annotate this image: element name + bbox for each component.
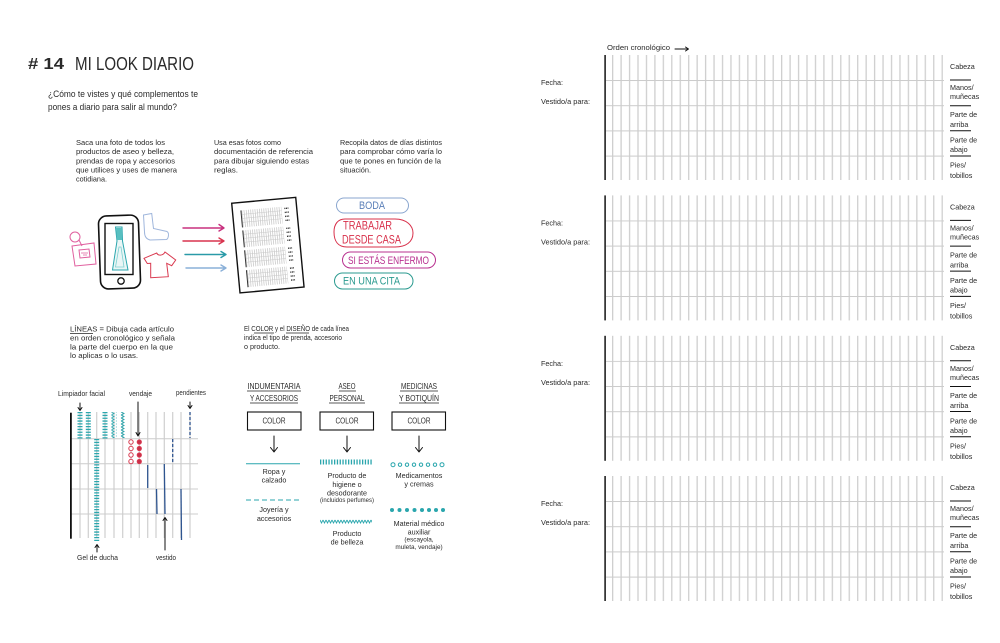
chart block 1: muñecas: [950, 92, 980, 101]
legend column: indumentaria: Joyería y: [259, 505, 289, 514]
subtitle question: pones a diario para salir al mundo?: [48, 102, 177, 112]
legend column: indumentaria: Ropa y: [263, 467, 286, 476]
legend column: indumentaria: accesorios: [257, 514, 292, 523]
blue clothing lines: [148, 412, 190, 540]
text block: step 3: para comprobar cómo varía lo: [340, 147, 442, 156]
text block: líneas: LÍNEAS = Dibuja cada artículo: [70, 324, 174, 334]
legend column: aseo personal: [320, 382, 374, 546]
chart block 3: tobillos: [950, 452, 973, 461]
text block: step 3: [340, 138, 442, 174]
text block: líneas: [70, 324, 176, 360]
text block: step 2: [214, 138, 314, 174]
chart block 4: Parte de: [950, 531, 977, 540]
chart block 1: abajo: [950, 145, 968, 154]
pill: si estás enfermo: [342, 252, 436, 268]
chart block 2: tobillos: [950, 311, 973, 320]
text block: líneas: la parte del cuerpo en la que: [70, 342, 173, 352]
chart block 2: arriba: [950, 260, 968, 269]
icon: phone with bottle: [98, 215, 141, 289]
pill: boda: [336, 198, 408, 213]
chart block 1: arriba: [950, 120, 968, 129]
legend column: medicinas: Y BOTIQUÍN: [399, 393, 439, 403]
chart block 4: abajo: [950, 566, 968, 575]
chart block 3: Manos/: [950, 364, 974, 373]
legend column: indumentaria: COLOR: [262, 416, 286, 426]
grid of example chart: [70, 412, 198, 539]
chart block 4: muñecas: [950, 513, 980, 522]
text block: step 3: que te pones en función de la: [340, 156, 442, 166]
chart block 4: Vestido/a para:: [541, 518, 590, 527]
text block: step 2: documentación de referencia: [214, 147, 314, 156]
legend column: medicinas: Material médico: [394, 519, 444, 528]
legend column: aseo personal: higiene o: [332, 480, 362, 489]
pill: en una cita: [334, 273, 413, 289]
icon: t-shirt: [144, 252, 176, 278]
pill: si estás enfermo: SI ESTÁS ENFERMO: [348, 254, 429, 267]
legend column: medicinas: Medicamentos: [396, 471, 443, 480]
teal hygiene marks: [80, 412, 105, 541]
arrows: photos to sheet: [183, 224, 226, 271]
text block: step 2: reglas.: [214, 166, 238, 174]
chart block 3: Parte de: [950, 391, 977, 400]
annotation labels: Limpiador facial: [58, 389, 105, 398]
chart block 1: Vestido/a para:: [541, 97, 590, 106]
chart block 1: Cabeza: [950, 62, 975, 71]
chart block 3: Cabeza: [950, 343, 975, 352]
chart block 4: tobillos: [950, 592, 973, 601]
chart block 1: Parte de: [950, 110, 977, 119]
text block: color y diseño: indica el tipo de prenda, accesorio: [244, 333, 342, 342]
annotation labels: [58, 388, 206, 562]
chart block 2: Vestido/a para:: [541, 237, 590, 246]
chart block 1: Fecha:: [541, 78, 563, 87]
chart block 4: Cabeza: [950, 483, 975, 492]
legend column: indumentaria: INDUMENTARIA: [248, 382, 301, 391]
text block: step 2: para dibujar siguiendo estas: [214, 156, 309, 166]
chart block 2: Pies/: [950, 301, 966, 310]
chart block 4: Parte de: [950, 556, 977, 566]
chart block 4: Manos/: [950, 504, 974, 513]
chart block 1: tobillos: [950, 171, 973, 180]
text block: step 1: que utilices y uses de manera: [76, 166, 178, 174]
chart block 1: [541, 55, 980, 180]
chart block 3: Parte de: [950, 416, 977, 425]
text block: step 1: [76, 138, 178, 184]
chart block 3: muñecas: [950, 373, 980, 382]
text block: color y diseño: [244, 324, 350, 351]
legend column: medicinas: (escayola,: [404, 536, 434, 544]
icon: sock: [144, 214, 168, 240]
chart block 2: Fecha:: [541, 218, 563, 227]
chart block 4: Fecha:: [541, 499, 563, 508]
legend column: medicinas: [390, 382, 446, 551]
legend column: medicinas: COLOR: [408, 416, 431, 426]
chart block 1: Parte de: [950, 136, 977, 144]
text block: líneas: lo aplicas o lo usas.: [70, 351, 138, 360]
legend column: aseo personal: COLOR: [336, 416, 359, 426]
legend column: medicinas: muleta, vendaje): [395, 544, 443, 551]
chart block 4: Pies/: [950, 582, 966, 590]
annotation labels: vendaje: [129, 389, 152, 398]
chart block 3: abajo: [950, 426, 968, 435]
chart block 2: abajo: [950, 285, 968, 294]
text block: color y diseño: El COLOR y el DISEÑO de cada línea: [244, 324, 350, 333]
annotation labels: pendientes: [176, 388, 206, 397]
legend column: aseo personal: Producto de: [328, 471, 366, 480]
annotation arrows: [78, 402, 192, 552]
legend column: medicinas: auxiliar: [408, 528, 431, 536]
chart block 2: Parte de: [950, 250, 977, 259]
legend column: aseo personal: Producto: [333, 529, 361, 538]
text block: step 1: prendas de ropa y accesorios: [76, 156, 175, 166]
pill: boda: BODA: [359, 200, 386, 212]
text block: step 3: situación.: [340, 166, 371, 174]
heading: number: # 14: [28, 56, 64, 73]
legend column: indumentaria: calzado: [262, 476, 286, 484]
pill: en una cita: EN UNA CITA: [343, 276, 401, 288]
legend column: indumentaria: Y ACCESORIOS: [250, 394, 298, 403]
annotation labels: Gel de ducha: [77, 553, 118, 562]
text block: step 1: Saca una foto de todos los: [76, 138, 165, 147]
chart block 3: Fecha:: [541, 359, 563, 368]
chart block 4: [541, 476, 980, 601]
chart block 1: Manos/: [950, 83, 974, 92]
pill: trabajar desde casa: TRABAJAR: [343, 218, 392, 232]
text block: step 2: Usa esas fotos como: [214, 138, 281, 147]
legend column: aseo personal: PERSONAL: [330, 394, 365, 403]
chart block 2: [541, 195, 980, 320]
annotation labels: vestido: [156, 553, 176, 562]
legend column: aseo personal: ASEO: [338, 382, 356, 391]
legend column: indumentaria: [246, 382, 301, 523]
text block: color y diseño: o producto.: [244, 342, 280, 351]
chart block 2: Cabeza: [950, 202, 975, 211]
legend column: aseo personal: desodorante: [327, 488, 367, 498]
chart block 2: muñecas: [950, 232, 980, 241]
pill: trabajar desde casa: DESDE CASA: [342, 232, 401, 246]
teal beauty zigzags: [112, 412, 125, 438]
text block: líneas: en orden cronológico y señala: [70, 334, 176, 342]
chart block 3: Pies/: [950, 441, 966, 450]
axis label: orden cronológico: Orden cronológico: [607, 43, 670, 52]
chart block 3: arriba: [950, 401, 968, 410]
chart: example line chart: [58, 388, 206, 562]
sheet: miniature of the chart page: [232, 197, 304, 293]
subtitle question: ¿Cómo te vistes y qué complementos te: [48, 89, 198, 99]
icon: perfume bottle: [70, 232, 96, 266]
chart block 2: Manos/: [950, 223, 974, 232]
legend column: aseo personal: (incluidos perfumes): [320, 498, 374, 504]
chart block 4: arriba: [950, 541, 968, 550]
legend column: medicinas: y cremas: [404, 480, 434, 489]
text block: step 1: cotidiana.: [76, 174, 107, 184]
red medicine dots: [129, 440, 141, 464]
chart block 3: Vestido/a para:: [541, 378, 590, 387]
chart block 1: Pies/: [950, 160, 966, 170]
legend column: medicinas: MEDICINAS: [401, 382, 437, 391]
subtitle question: [48, 89, 198, 112]
chart block 2: Parte de: [950, 276, 977, 285]
legend column: aseo personal: de belleza: [331, 538, 363, 546]
text block: step 1: productos de aseo y belleza,: [76, 147, 174, 156]
title: MI LOOK DIARIO: [75, 53, 194, 74]
chart block 3: [541, 336, 980, 461]
text block: step 3: Recopila datos de días distintos: [340, 138, 442, 147]
pill: trabajar desde casa: [334, 218, 413, 247]
